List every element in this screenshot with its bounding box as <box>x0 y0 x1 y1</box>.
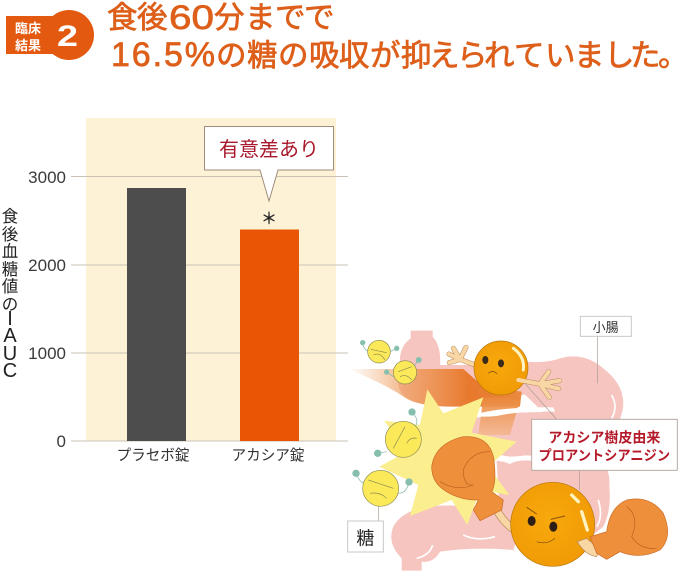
y axis tick labels: 1000 <box>28 344 66 363</box>
lower gap <box>495 454 540 464</box>
absorption beam <box>348 369 522 407</box>
asterisk: ＊ <box>261 211 277 228</box>
y axis title: 血 <box>2 242 18 261</box>
y axis tick labels <box>28 168 66 451</box>
label: acacia bark proanthocyanidin: アカシア樹皮由来 <box>548 429 660 445</box>
y axis title: I <box>7 308 13 330</box>
badge: clinical result 2: 2 <box>57 20 78 53</box>
character: defending ball <box>449 341 559 397</box>
title: 食後 <box>107 1 168 35</box>
bar: acacia <box>240 230 299 441</box>
title <box>107 0 679 74</box>
label: small intestine <box>580 316 631 336</box>
badge: clinical result 2 <box>6 10 94 60</box>
y axis title: 食 <box>2 207 18 226</box>
label: sugar <box>348 521 383 552</box>
title: の糖の吸収が抑えられていました。 <box>216 39 679 73</box>
label: sugar: 糖 <box>356 529 374 549</box>
label: acacia bark proanthocyanidin <box>532 419 677 470</box>
y axis title: 糖 <box>2 260 18 279</box>
y axis title: C <box>3 360 17 382</box>
y axis title: の <box>2 296 18 314</box>
y axis title: U <box>3 343 17 365</box>
x axis labels <box>117 447 305 464</box>
callout: significant difference: 有意差あり <box>219 138 319 161</box>
label: small intestine: 小腸 <box>593 320 619 335</box>
sugar molecules <box>356 340 421 506</box>
chart: postprandial blood glucose IAUC <box>2 118 348 464</box>
title: 60 <box>169 0 214 37</box>
label: acacia bark proanthocyanidin: プロアントシアニジン <box>538 447 670 463</box>
title: 16.5% <box>111 36 215 74</box>
callout: significant difference <box>204 126 334 201</box>
y axis title: A <box>3 325 17 347</box>
bar: placebo <box>127 188 186 441</box>
gap between intestine loops <box>442 407 555 417</box>
chart background <box>86 118 336 441</box>
illustration: small intestine with characters <box>348 316 677 571</box>
y axis tick labels: 3000 <box>28 168 66 187</box>
intestine highlights <box>612 395 615 418</box>
y axis title <box>2 207 19 382</box>
gridlines <box>71 176 348 441</box>
character: attacking ball <box>511 482 595 566</box>
y axis title: 後 <box>2 225 19 244</box>
boxing glove: right <box>577 499 668 559</box>
y axis title: 値 <box>2 277 18 296</box>
label lines <box>378 336 597 522</box>
y axis tick labels: 0 <box>57 432 66 451</box>
badge: clinical result 2: 臨床 <box>15 21 41 36</box>
badge: clinical result 2: 結果 <box>15 38 41 53</box>
title: 分までで <box>214 1 334 35</box>
x axis labels: プラセボ錠 <box>117 447 190 464</box>
impact burst <box>379 389 517 525</box>
x axis labels: アカシア錠 <box>232 447 305 464</box>
y axis tick labels: 2000 <box>28 256 66 275</box>
boxing glove: left <box>432 437 515 530</box>
intestine <box>391 331 623 571</box>
